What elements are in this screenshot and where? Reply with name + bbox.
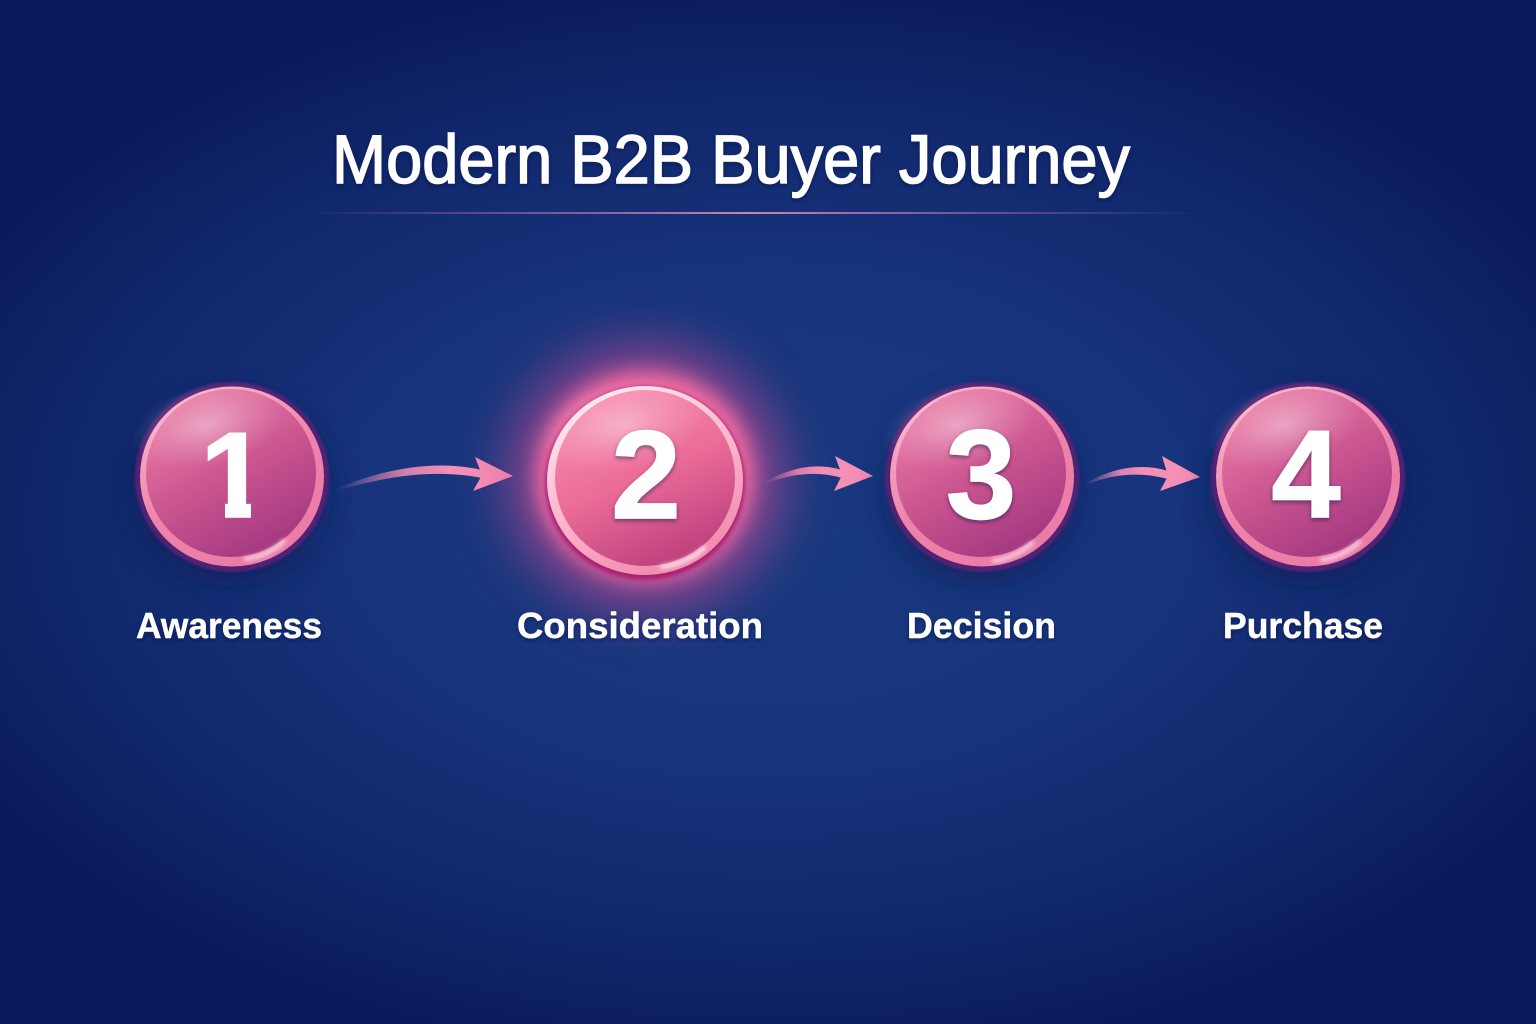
number 1: 1 [200, 407, 268, 543]
step 1: Awareness [134, 381, 335, 642]
step 3: Decision [872, 365, 1082, 646]
number 4: 4 [1272, 406, 1341, 544]
arrow: decision to purchase [1086, 456, 1200, 491]
title: Modern B2B Buyer Journey [332, 121, 1130, 198]
badge 4 [1198, 365, 1408, 586]
arrow: awareness to consideration [336, 457, 513, 491]
number 2: 2 [611, 406, 681, 545]
label Consideration: Consideration [517, 605, 763, 646]
label Decision: Decision [907, 605, 1056, 646]
number 3: 3 [946, 404, 1016, 545]
badge 1 [122, 365, 332, 586]
step 2: Consideration [507, 344, 783, 646]
arrow: consideration to decision [765, 456, 873, 491]
step 4: Purchase [1198, 365, 1408, 646]
label Purchase: Purchase [1223, 605, 1383, 646]
badge 2 with glow [507, 344, 783, 612]
badge 3 [872, 365, 1082, 586]
label Awareness: Awareness [136, 605, 322, 646]
title underline [300, 212, 1200, 214]
